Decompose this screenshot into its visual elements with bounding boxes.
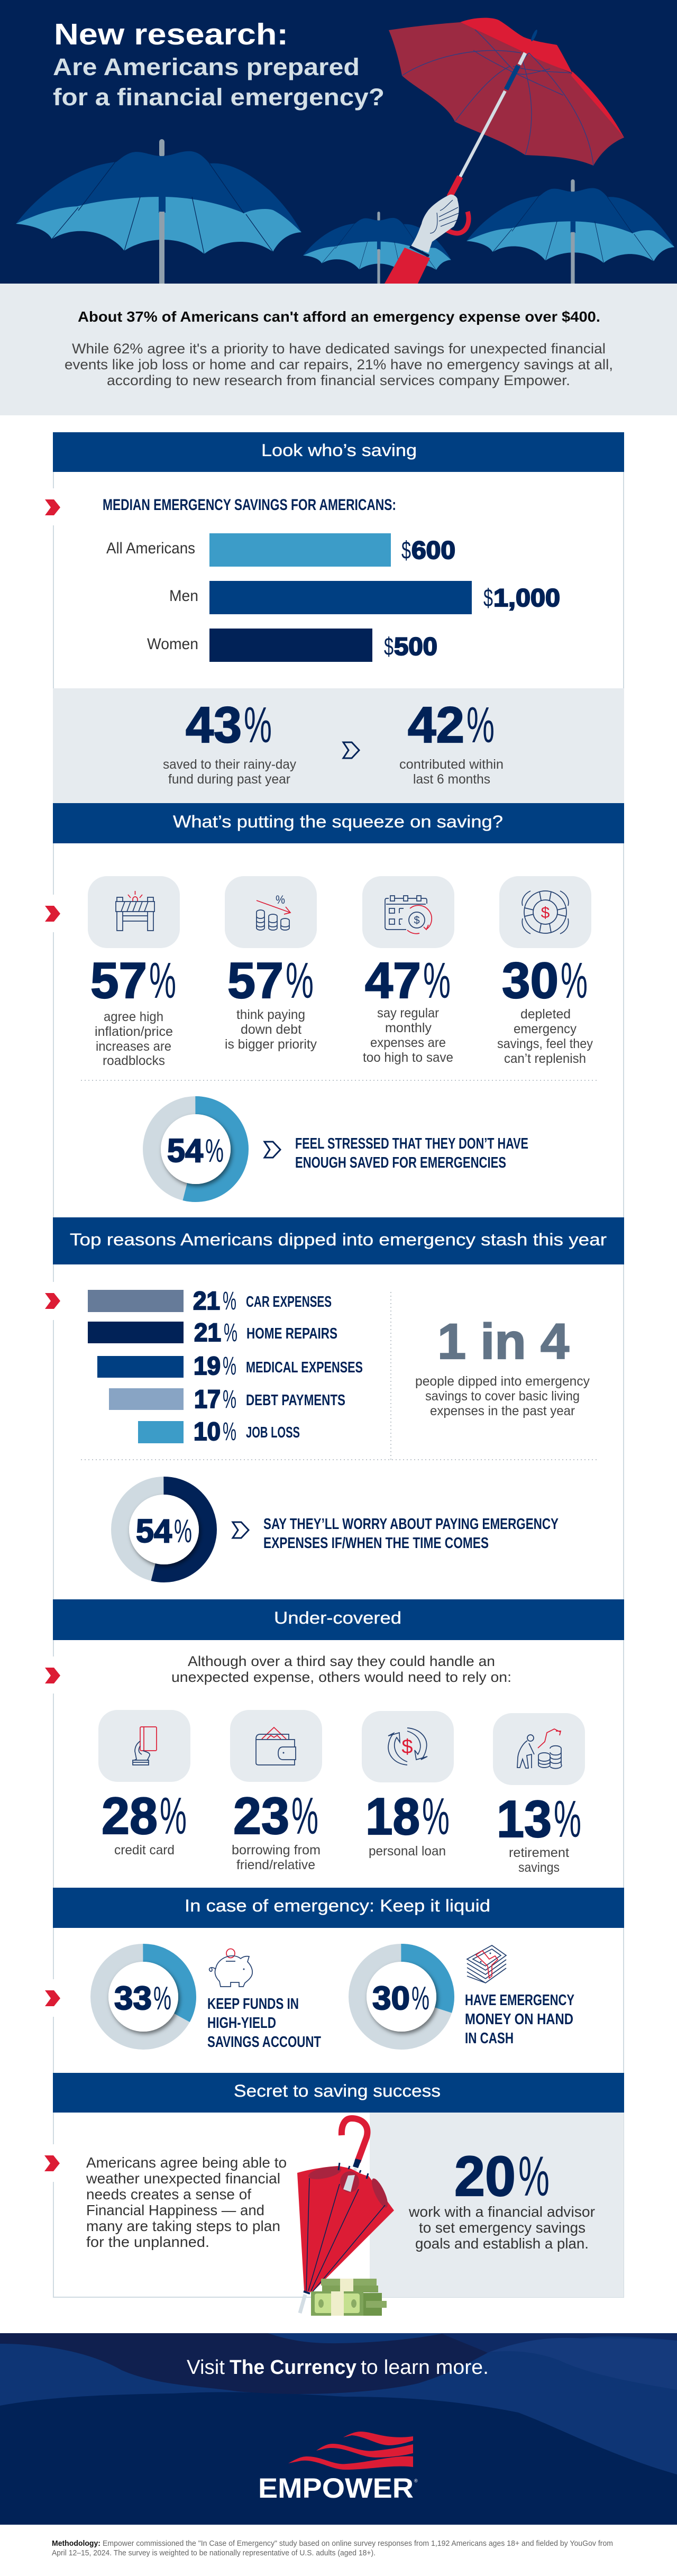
stat card: 30% depleted savings: can’t replenish <box>504 1051 586 1066</box>
stat card: 47% monthly expenses: say regular <box>377 1006 439 1021</box>
stat card: 30% depleted savings: savings, feel they <box>497 1036 593 1051</box>
panel: 20% work with advisor: % <box>518 2144 550 2208</box>
text block: financial happiness: many are taking steps to plan <box>86 2218 280 2234</box>
text block: financial happiness: Americans agree being able to <box>86 2154 287 2171</box>
chart heading: MEDIAN EMERGENCY SAVINGS FOR AMERICANS: <box>103 496 396 514</box>
bar: all Americans: $ <box>401 536 411 564</box>
stat: 1 in 4: 1 in 4 <box>437 1314 569 1370</box>
title: Are Americans prepared <box>53 53 360 80</box>
bar chart: reasons for dipping into savings <box>88 1287 363 1446</box>
stat card: 57% inflation: roadblocks <box>103 1053 165 1068</box>
call to action: to learn more. <box>361 2356 489 2379</box>
stat card: 57% debt: % <box>286 952 314 1009</box>
stat card: 57% inflation: 57 <box>90 952 147 1009</box>
content panel outline <box>53 432 624 2297</box>
icon: chevron <box>264 1142 280 1158</box>
stat card: 13% retirement savings: 13 <box>497 1790 552 1848</box>
stat card: 47% monthly expenses: % <box>423 952 451 1009</box>
stat card: 57% debt: down debt <box>241 1022 301 1037</box>
title <box>53 17 385 111</box>
callout: feel stressed <box>295 1135 528 1171</box>
stat card: 18% personal loan <box>362 1711 454 1859</box>
stat: 1 in 4: savings to cover basic living <box>425 1389 580 1404</box>
bar: home repairs: % <box>224 1319 237 1347</box>
donut chart: 30% cash: % <box>411 1980 429 2017</box>
section header: squeeze on saving <box>53 803 624 843</box>
bar: job loss: % <box>223 1418 236 1446</box>
stat: 43%: saved to their rainy-day <box>163 757 296 772</box>
stat card: 13% retirement savings: retirement <box>509 1845 569 1860</box>
bar: debt payments: % <box>223 1386 236 1414</box>
stat card: 47% monthly expenses: expenses are <box>370 1035 446 1050</box>
text block: under-covered intro <box>171 1653 511 1685</box>
intro panel <box>0 284 677 415</box>
title: for a financial emergency? <box>53 84 385 111</box>
bar: job loss <box>138 1418 300 1446</box>
text block: under-covered intro: Although over a third say they could handle an <box>188 1653 495 1669</box>
stat card: 30% depleted savings <box>497 876 593 1066</box>
icon: circular arrows with dollar <box>388 1728 427 1765</box>
stat: 43%: 43 <box>186 697 242 753</box>
donut chart: 33% high-yield: 33 <box>114 1980 152 2017</box>
donut chart: 33% high-yield <box>99 1953 187 2041</box>
stat: 1 in 4: expenses in the past year <box>430 1404 575 1418</box>
callout: will worry <box>263 1516 559 1552</box>
text block: financial happiness: weather unexpected financial <box>86 2170 280 2187</box>
stat: 1 in 4 <box>415 1314 590 1418</box>
stat card: 57% debt <box>225 876 317 1052</box>
bar: all Americans: All Americans <box>106 540 195 557</box>
icon: stack of cash <box>467 1945 506 1983</box>
icon: life ring with dollar: $ <box>541 904 550 922</box>
intro panel: While 62% agree it's a priority to have dedicated savings for unexpected financial <box>72 341 606 357</box>
stat card: 28% credit card <box>98 1710 190 1858</box>
panel: 20% work with advisor: to set emergency savings <box>419 2219 585 2236</box>
bar: job loss: JOB LOSS <box>246 1424 300 1441</box>
stat card: 23% borrowing: borrowing from <box>232 1843 321 1858</box>
stat card: 30% depleted savings: depleted <box>520 1007 571 1022</box>
callout: high-yield savings: KEEP FUNDS IN <box>207 1996 299 2013</box>
callout: feel stressed: ENOUGH SAVED FOR EMERGENCIES <box>295 1154 506 1171</box>
text block: under-covered intro: unexpected expense, others would need to rely on: <box>171 1669 511 1685</box>
donut chart: 30% cash: 30 <box>372 1980 410 2017</box>
methodology note: April 12–15, 2024. The survey is weighted to be nationally representative of U.S. adults (aged 18+). <box>52 2548 376 2557</box>
callout: high-yield savings: SAVINGS ACCOUNT <box>207 2034 321 2051</box>
stat: 43% <box>163 697 296 787</box>
stat card: 13% retirement savings: savings <box>518 1860 560 1875</box>
callout: feel stressed: FEEL STRESSED THAT THEY DON’T HAVE <box>295 1135 528 1152</box>
section marker <box>45 1282 60 1320</box>
bar: car expenses: % <box>223 1287 236 1315</box>
icon: chevron <box>343 742 359 758</box>
donut chart: 33% high-yield: % <box>153 1980 171 2017</box>
bar: medical expenses: MEDICAL EXPENSES <box>246 1359 363 1376</box>
text block: financial happiness: Financial Happiness — and <box>86 2202 264 2218</box>
panel: 20% work with advisor <box>370 2113 624 2297</box>
bar: job loss: 10 <box>194 1418 221 1446</box>
bar: men <box>169 581 560 614</box>
stat card: 23% borrowing <box>230 1710 322 1872</box>
logo: Empower: ® <box>414 2478 418 2483</box>
section header: look who's saving: Look who’s saving <box>261 441 417 460</box>
bar: women <box>147 629 437 662</box>
icon: road barricade <box>116 891 154 931</box>
stat: 1 in 4: people dipped into emergency <box>415 1374 590 1389</box>
section marker <box>45 1979 60 2017</box>
donut chart: 54% feel stressed: 54 <box>167 1133 204 1169</box>
bar: home repairs: 21 <box>194 1319 221 1347</box>
donut chart: 54% will worry: 54 <box>136 1513 172 1550</box>
bar: debt payments: DEBT PAYMENTS <box>246 1392 345 1409</box>
stat: 43%: % <box>244 697 272 753</box>
section header: secret to saving success <box>53 2073 624 2113</box>
donut chart: 54% will worry <box>120 1486 208 1573</box>
icon: piggy bank <box>209 1949 252 1987</box>
stat card: 47% monthly expenses <box>362 876 454 1065</box>
callout: cash on hand: HAVE EMERGENCY <box>465 1992 574 2009</box>
cash stack <box>311 2279 387 2316</box>
text block: financial happiness: needs creates a sense of <box>86 2186 251 2202</box>
bar: women: $ <box>384 632 394 660</box>
intro panel: events like job loss or home and car repairs, 21% have no emergency savings at all, <box>65 357 613 372</box>
icon: older person with coins <box>517 1729 562 1769</box>
stat card: 57% inflation: increases are <box>96 1039 171 1054</box>
stat card: 13% retirement savings: % <box>554 1790 581 1848</box>
stat: 42%: contributed within <box>399 757 504 772</box>
section header: under-covered: Under-covered <box>274 1608 401 1627</box>
stat card: 18% personal loan: personal loan <box>369 1844 446 1859</box>
section marker <box>44 2144 60 2182</box>
section header: look who's saving <box>53 432 624 472</box>
section marker <box>45 488 60 525</box>
bar: home repairs <box>88 1319 337 1347</box>
icon: circular arrows with dollar: $ <box>401 1736 413 1758</box>
bar: medical expenses: % <box>223 1352 236 1380</box>
stat card: 28% credit card: credit card <box>114 1843 175 1858</box>
bar: women: 500 <box>394 632 437 660</box>
panel: 20% work with advisor: 20 <box>454 2144 516 2208</box>
illustration: blue umbrellas <box>16 139 674 307</box>
panel: 20% work with advisor: goals and establish a plan. <box>415 2235 589 2252</box>
panel: saved stats <box>53 688 624 803</box>
section header: under-covered <box>53 1599 624 1640</box>
section marker <box>45 895 60 932</box>
bar chart: median emergency savings <box>103 496 560 662</box>
section header: keep it liquid: In case of emergency: Keep it liquid <box>185 1896 490 1915</box>
donut chart: 54% will worry: % <box>174 1513 192 1550</box>
stat card: 23% borrowing: friend/relative <box>236 1858 315 1872</box>
section header: top reasons: Top reasons Americans dipped into emergency stash this year <box>70 1230 607 1249</box>
stat: 42%: % <box>466 697 495 753</box>
icon: falling percent and coins <box>257 893 290 930</box>
stat card: 57% inflation <box>88 876 180 1068</box>
section marker <box>45 1656 60 1694</box>
bar: medical expenses: 19 <box>194 1352 221 1380</box>
methodology note: Methodology: <box>52 2539 100 2548</box>
bar: debt payments: 17 <box>194 1386 221 1414</box>
callout: will worry: EXPENSES IF/WHEN THE TIME COMES <box>263 1535 489 1552</box>
stat card: 57% inflation: agree high <box>104 1009 163 1024</box>
title: New research: <box>54 17 288 51</box>
bar: all Americans: 600 <box>411 536 455 564</box>
intro panel: according to new research from financial services company Empower. <box>107 372 570 388</box>
icon: wallet with bill <box>256 1727 296 1765</box>
section header: top reasons <box>53 1217 624 1264</box>
donut chart: 54% feel stressed <box>152 1105 240 1193</box>
stat card: 57% debt: is bigger priority <box>225 1037 317 1052</box>
callout: will worry: SAY THEY’LL WORRY ABOUT PAYING EMERGENCY <box>263 1516 559 1533</box>
hero banner background <box>0 0 677 284</box>
section header: secret to saving success: Secret to saving success <box>234 2081 441 2100</box>
icon: life ring with dollar <box>522 891 569 934</box>
stat card: 57% inflation: % <box>149 952 176 1009</box>
stat: 42%: 42 <box>408 697 464 753</box>
bar: women: Women <box>147 635 198 653</box>
section header: keep it liquid <box>53 1888 624 1928</box>
icon: falling percent and coins: % <box>276 893 285 906</box>
stat card: 57% debt: 57 <box>227 952 283 1009</box>
bar: home repairs: HOME REPAIRS <box>246 1325 337 1342</box>
donut chart: 54% feel stressed: % <box>205 1133 224 1169</box>
call to action: The Currency <box>230 2356 356 2379</box>
stat card: 57% debt: think paying <box>236 1007 305 1022</box>
bar: car expenses: 21 <box>193 1287 220 1315</box>
icon: calendar and dollar coin: $ <box>414 915 420 926</box>
stat card: 47% monthly expenses: 47 <box>365 952 421 1009</box>
callout: cash on hand: IN CASH <box>465 2030 514 2047</box>
bar: men: 1,000 <box>493 584 560 612</box>
panel: 20% work with advisor: work with a financial advisor <box>408 2204 595 2220</box>
bar: all Americans <box>106 533 455 567</box>
stat card: 57% inflation: inflation/price <box>95 1024 173 1039</box>
stat card: 47% monthly expenses: too high to save <box>363 1050 453 1065</box>
icon: calendar and dollar coin <box>385 896 432 934</box>
illustration: hand holding red umbrella <box>385 18 624 284</box>
intro panel: About 37% of Americans can't afford an emergency expense over $400. <box>78 308 600 325</box>
bar: medical expenses <box>97 1352 363 1380</box>
bar: debt payments <box>109 1386 345 1414</box>
stat: 42% <box>399 697 504 787</box>
callout: high-yield savings: HIGH-YIELD <box>207 2015 276 2032</box>
stat card: 30% depleted savings: % <box>561 952 588 1009</box>
text block: financial happiness: for the unplanned. <box>86 2234 209 2250</box>
stat card: 47% monthly expenses: monthly <box>385 1021 432 1035</box>
bar: men: Men <box>169 587 198 605</box>
section header: squeeze on saving: What’s putting the squeeze on saving? <box>173 812 503 831</box>
stat card: 30% depleted savings: emergency <box>514 1022 577 1036</box>
logo: Empower: EMPOWER <box>258 2473 414 2504</box>
methodology note <box>52 2539 613 2557</box>
stat card: 28% credit card: 28 <box>102 1787 158 1845</box>
call to action <box>187 2356 489 2379</box>
stat card: 23% borrowing: 23 <box>233 1787 289 1845</box>
bar: car expenses <box>88 1287 332 1315</box>
text block: financial happiness <box>86 2154 287 2250</box>
stat card: 30% depleted savings: 30 <box>502 952 559 1009</box>
illustration: closed red umbrella with cash <box>297 2118 394 2316</box>
stat card: 13% retirement savings <box>493 1713 585 1875</box>
logo: Empower <box>258 2432 418 2504</box>
stat card: 18% personal loan: 18 <box>365 1787 420 1845</box>
callout: cash on hand: MONEY ON HAND <box>465 2011 573 2028</box>
icon: chevron <box>233 1522 249 1538</box>
stat: 42%: last 6 months <box>413 772 490 787</box>
icon: hand with credit card <box>133 1727 157 1765</box>
callout: cash on hand <box>465 1992 574 2047</box>
stat card: 28% credit card: % <box>160 1787 187 1845</box>
bar: men: $ <box>483 584 493 612</box>
stat card: 23% borrowing: % <box>291 1787 318 1845</box>
donut chart: 30% cash <box>358 1953 445 2041</box>
methodology note: Empower commissioned the "In Case of Emergency" study based on online survey responses from 1,192 Americans ages 18+ and fielded by YouGov from <box>103 2539 613 2548</box>
callout: high-yield savings <box>207 1996 321 2051</box>
stat card: 18% personal loan: % <box>422 1787 450 1845</box>
stat: 43%: fund during past year <box>168 772 290 787</box>
footer band with waves <box>0 2333 677 2525</box>
call to action: Visit <box>187 2356 225 2379</box>
bar: car expenses: CAR EXPENSES <box>246 1294 332 1310</box>
